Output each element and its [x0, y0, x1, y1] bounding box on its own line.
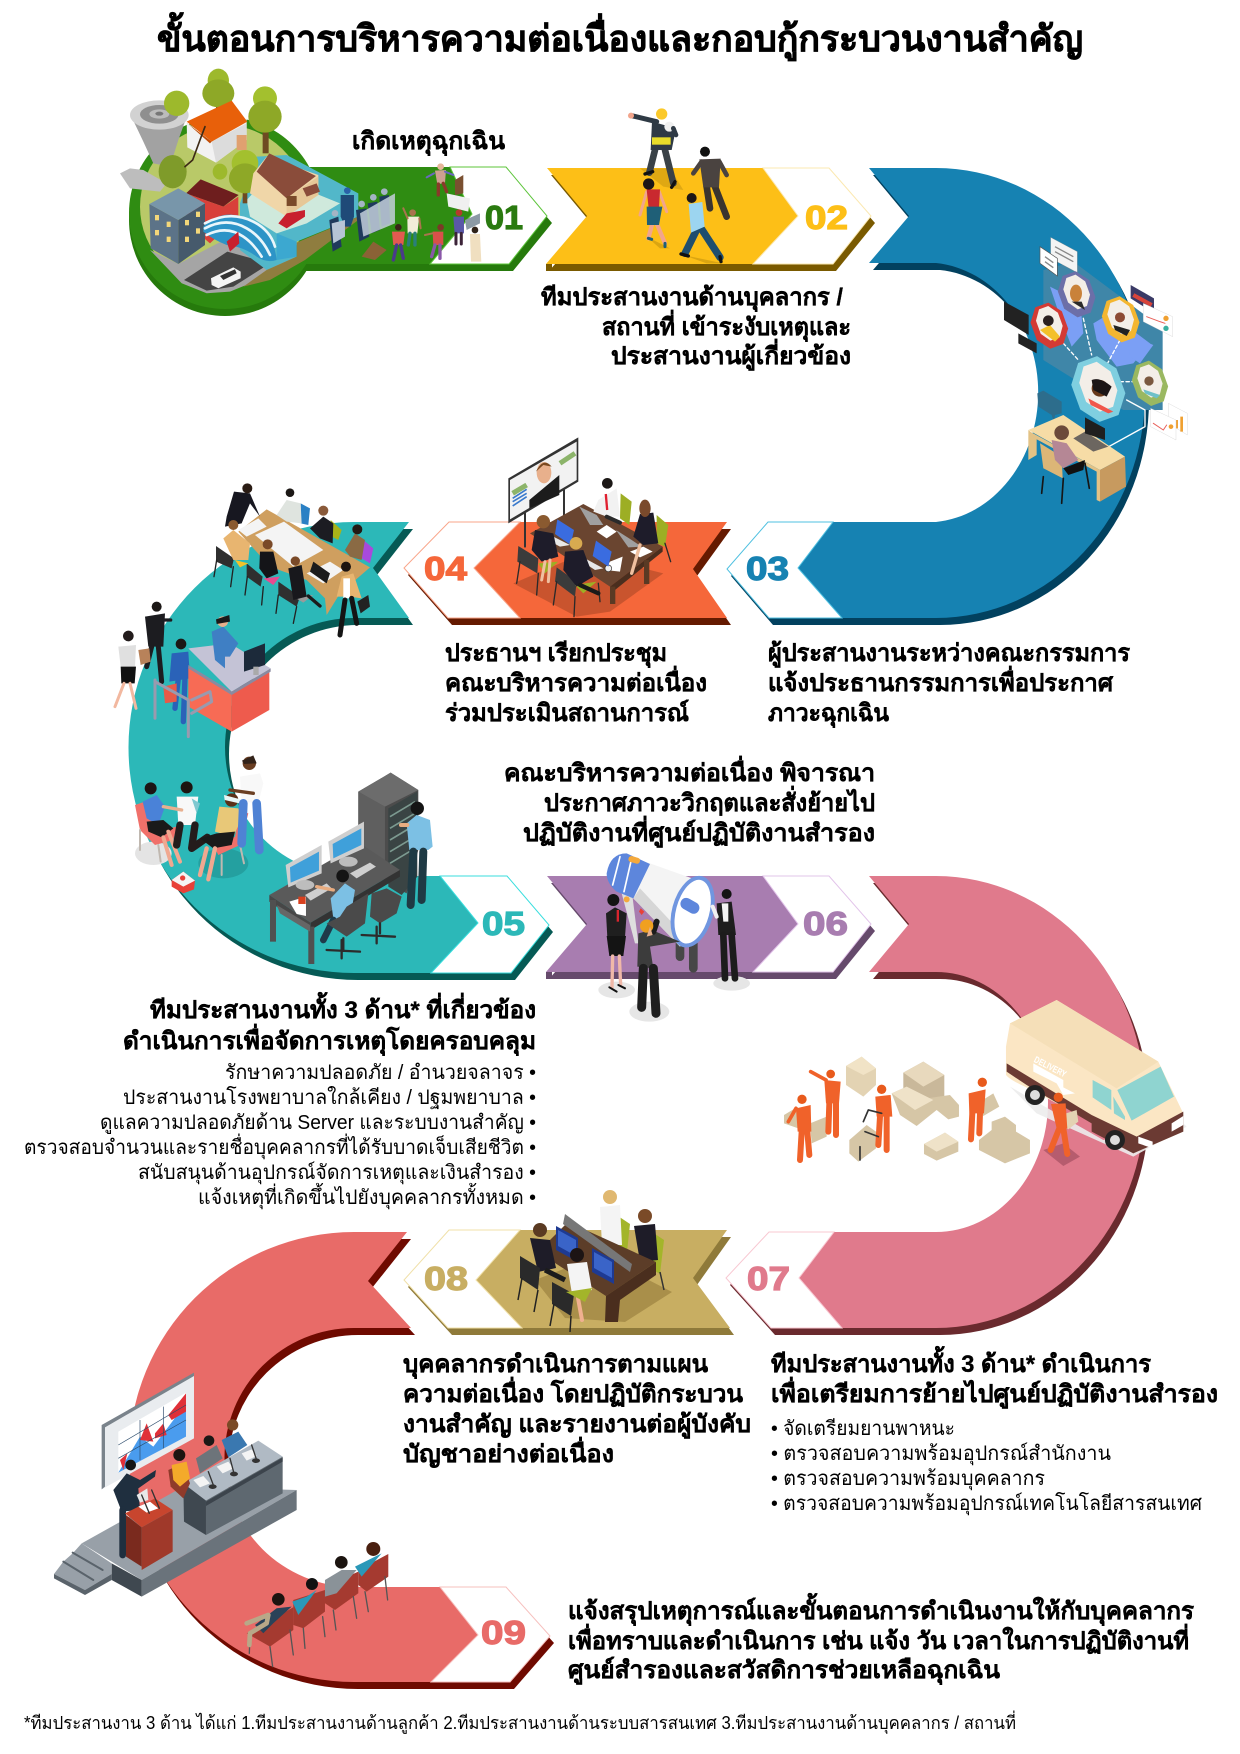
step 02 yellow chevron: 02 [805, 199, 848, 236]
step 05 bullet list: ประสานงานโรงพยาบาลใกล้เคียง / ปฐมพยาบาล • [123, 1086, 536, 1109]
step 07 bullet list: • ตรวจสอบความพร้อมอุปกรณ์เทคโนโลยีสารสนเทศ [771, 1492, 1202, 1516]
people seated [532, 478, 658, 593]
step 03 description: ผู้ประสานงานระหว่างคณะกรรมการ [768, 640, 1130, 668]
illustration: megaphone announcement [598, 853, 750, 1022]
front chairs [520, 1256, 574, 1316]
desk with monitors [269, 822, 400, 964]
illustration: relocation delivery van and workers [784, 1000, 1187, 1166]
audience people [247, 1542, 382, 1645]
step 07 bullet list: • จัดเตรียมยานพาหนะ [771, 1418, 955, 1440]
step 06 purple chevron: 06 [803, 905, 848, 942]
walking man with briefcase [337, 562, 370, 635]
illustration: staff at alternate site [518, 1190, 672, 1332]
red chairs [135, 802, 248, 855]
step 04 description: ร่วมประเมินสถานการณ์ [445, 699, 689, 727]
megaphone [607, 853, 722, 952]
seated woman [143, 782, 180, 865]
meeting table [238, 509, 370, 615]
step 02 description [541, 284, 851, 371]
illustration: announcement stage and audience [54, 1373, 388, 1667]
step 09 description: เพื่อทราบและดำเนินการ เช่น แจ้ง วัน เวลาในการปฏิบัติงานที่ [568, 1623, 1189, 1655]
step 05 description: ทีมประสานงานทั้ง 3 ด้าน* ที่เกี่ยวข้อง [150, 991, 536, 1024]
step 05 description [24, 991, 536, 1210]
man behind megaphone [680, 943, 693, 968]
step 07 description: เพื่อเตรียมการย้ายไปศูนย์ปฏิบัติงานสำรอง [771, 1376, 1218, 1409]
illustration: response team running [628, 108, 730, 263]
step 06 description: ปฏิบัติงานที่ศูนย์ปฏิบัติงานสำรอง [523, 815, 875, 848]
step 09 description [568, 1592, 1194, 1686]
text: emergency occurs: เกิดเหตุฉุกเฉิน [352, 128, 506, 157]
standing nurse [230, 755, 263, 850]
kneeling helper [163, 781, 207, 848]
office chairs [327, 888, 402, 937]
woman in red top [640, 178, 667, 247]
step 05 bullet list: ตรวจสอบจำนวนและรายชื่อบุคคลากรที่ได้รับบาดเจ็บเสียชีวิต • [24, 1133, 536, 1160]
step 06 description [504, 755, 875, 848]
step 08 gold chevron [404, 1230, 734, 1335]
speaker at podium [113, 1460, 156, 1555]
step 05 description: ดำเนินการเพื่อจัดการเหตุโดยครอบคลุม [123, 1023, 536, 1057]
stage platform [54, 1487, 297, 1597]
step 07 pink band [726, 876, 1149, 1335]
van: DELIVERY [1032, 1055, 1069, 1080]
footnote: *ทีมประสานงาน 3 ด้าน ได้แก่ 1.ทีมประสานงานด้านลูกค้า 2.ทีมประสานงานด้านระบบสารสนเทศ 3.ทีมประสานงานด้านบุคคลากร / สถานที่ [24, 1710, 1016, 1734]
step 08 description: บุคคลากรดำเนินการตามแผน [403, 1351, 709, 1380]
step 07 bullet list: • ตรวจสอบความพร้อมบุคคลากร [771, 1468, 1045, 1491]
speech bubble [1037, 391, 1062, 423]
technician [401, 802, 433, 905]
step 03 description [768, 640, 1130, 729]
step 07 bullet list: • ตรวจสอบความพร้อมอุปกรณ์สำนักงาน [771, 1442, 1111, 1466]
van [1006, 1000, 1183, 1153]
chairs [216, 546, 300, 607]
first aid kit [172, 872, 195, 893]
step 06 description: คณะบริหารความต่อเนื่อง พิจารณา [504, 755, 875, 787]
step 03 blue band [727, 168, 1149, 625]
step 02 yellow chevron [546, 168, 875, 271]
step 05 bullet list: สนับสนุนด้านอุปกรณ์จัดการเหตุและเงินสำรอง • [138, 1161, 536, 1185]
step 07 description: ทีมประสานงานทั้ง 3 ด้าน* ดำเนินการ [771, 1345, 1151, 1378]
step 03 blue band: 03 [746, 550, 789, 587]
step 08 description [403, 1351, 751, 1468]
step 08 description: บัญชาอย่างต่อเนื่อง [403, 1436, 614, 1468]
standing woman [600, 1190, 622, 1245]
seated operator [317, 870, 355, 940]
step 08 description: ความต่อเนื่อง โดยปฏิบัติกระบวน [403, 1376, 744, 1408]
step 04 description: ประธานฯ เรียกประชุม [445, 640, 667, 669]
step 04 description [445, 640, 707, 727]
tsunami wave [203, 215, 297, 261]
step 04 orange chevron: 04 [424, 550, 468, 587]
title: ขั้นตอนการบริหารความต่อเนื่องและกอบกู้กระบวนงานสำคัญ [157, 12, 1083, 62]
step 04 description: คณะบริหารความต่อเนื่อง [445, 665, 707, 697]
panel table [183, 1441, 283, 1535]
step 04 orange chevron [404, 522, 731, 625]
long desk with monitors [538, 1214, 656, 1322]
people around table [223, 483, 365, 606]
seated woman with bandage [200, 793, 242, 879]
turnstile [155, 680, 212, 737]
step 01 green band: 01 [485, 199, 523, 236]
tornado [120, 100, 189, 192]
documents and charts [1004, 237, 1187, 440]
chairs [517, 546, 577, 597]
brown house [250, 153, 320, 228]
step 05 bullet list: รักษาความปลอดภัย / อำนวยจลาจร • [225, 1062, 536, 1084]
step 09 red band [129, 1232, 554, 1689]
back chairs [616, 1216, 664, 1274]
man in suit [634, 1209, 658, 1262]
man in orange cap [637, 919, 680, 1013]
server rack [358, 773, 418, 895]
illustration: chairman meeting [508, 437, 671, 617]
step 01 green band [129, 117, 552, 316]
illustration: first aid care [135, 755, 433, 964]
step 07 description [771, 1345, 1218, 1516]
table [530, 504, 663, 604]
workers in orange [788, 1070, 1067, 1160]
seated man [530, 1223, 565, 1280]
step 08 gold chevron: 08 [424, 1260, 468, 1297]
step 09 red band: 09 [481, 1614, 526, 1651]
red building [186, 179, 239, 243]
step 02 description: ทีมประสานงานด้านบุคลากร / [541, 284, 843, 313]
step 07 bullet list [771, 1418, 1202, 1516]
step 05 teal band [128, 522, 553, 980]
step 03 description: แจ้งประธานกรรมการเพื่อประกาศ [768, 665, 1114, 697]
step 07 pink band: 07 [747, 1260, 790, 1297]
step 05 bullet list: แจ้งเหตุที่เกิดขึ้นไปยังบุคคลากรทั้งหมด • [198, 1183, 536, 1210]
step 09 description: แจ้งสรุปเหตุการณ์และขั้นตอนการดำเนินงานให้กับบุคคลากร [568, 1592, 1194, 1627]
red car and van [211, 232, 241, 288]
illustration: emergency disaster scene [120, 69, 481, 293]
riot police with shields [329, 187, 395, 252]
podium [125, 1490, 173, 1570]
man in dark suit [693, 147, 727, 217]
video wall screen [508, 437, 578, 547]
reception desk [188, 615, 271, 732]
step 05 bullet list [24, 1062, 536, 1210]
boxes [784, 1057, 1078, 1163]
step 03 description: ภาวะฉุกเฉิน [768, 700, 890, 729]
step 09 description: ศูนย์สำรองและสวัสดิการช่วยเหลือฉุกเฉิน [568, 1656, 1001, 1686]
step 05 bullet list: ดูแลความปลอดภัยด้าน Server และระบบงานสำคัญ • [100, 1112, 536, 1135]
blue building [149, 188, 205, 264]
trees [159, 69, 282, 203]
step 02 description: สถานที่ เข้าระงับเหตุและ [602, 309, 851, 343]
desk with worker [1028, 415, 1126, 503]
man on the right [713, 889, 736, 978]
step 08 description: งานสำคัญ และรายงานต่อผู้บังคับ [403, 1411, 751, 1439]
step 06 purple chevron [546, 876, 875, 979]
panel members [168, 1419, 247, 1498]
laptops [550, 507, 642, 570]
step 02 description: ประสานงานผู้เกี่ยวข้อง [611, 338, 851, 371]
worker with megaphone [628, 108, 676, 187]
woman in suit [606, 894, 627, 992]
illustration: business continuity meeting and reception [115, 483, 373, 737]
white house [185, 101, 247, 167]
presentation chart board [102, 1373, 194, 1489]
illustration: coordinator and network panel [1004, 237, 1187, 503]
protesters [362, 163, 481, 262]
visitors [115, 602, 190, 722]
step 06 description: ประกาศภาวะวิกฤตและสั่งย้ายไป [544, 785, 875, 817]
seated woman [566, 1248, 592, 1320]
audience seats [247, 1554, 388, 1667]
man in blue shirt [681, 193, 721, 262]
step 05 teal band: 05 [482, 905, 525, 942]
octagon avatars [1026, 268, 1172, 427]
